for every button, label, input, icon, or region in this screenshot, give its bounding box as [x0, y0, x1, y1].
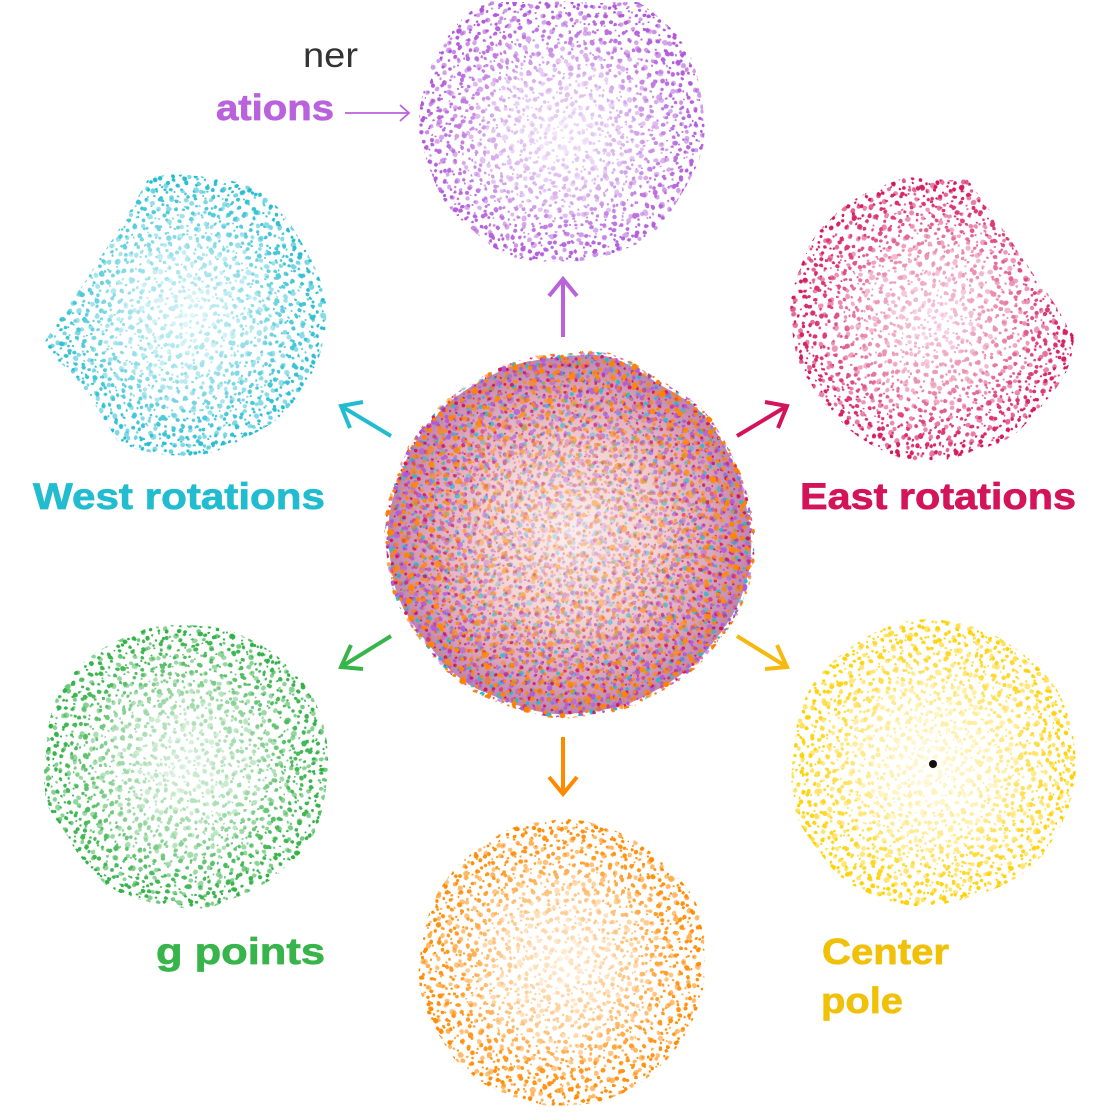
- label: pole: pole: [821, 980, 903, 1021]
- scatter: east rotations (crimson): [791, 178, 1074, 459]
- scatter: rotating points (green): [42, 623, 328, 909]
- arrow: up to purple: [549, 279, 577, 337]
- arrow: to yellow: [737, 636, 787, 669]
- arrow: to orange: [549, 737, 577, 794]
- arrow: to cyan: [341, 402, 391, 436]
- scatter: west rotations (cyan): [45, 172, 325, 456]
- scatter: center pole (yellow): [790, 621, 1076, 907]
- scatter: orange points: [419, 820, 705, 1106]
- label: green points: g points: [156, 931, 325, 972]
- arrow: to crimson: [737, 402, 787, 436]
- scatter: north rotations (purple): [420, 2, 704, 264]
- center pole marker: [929, 760, 937, 768]
- label: East rotations: East rotations: [800, 476, 1076, 517]
- label: top gray text: ner: [303, 36, 358, 75]
- arrow: to green: [341, 636, 391, 669]
- label: Center: Center: [822, 931, 949, 972]
- label: West rotations: West rotations: [33, 476, 325, 517]
- central combined sphere: [387, 352, 753, 718]
- label: purple rotations: ations: [216, 87, 334, 128]
- arrow: thin pointer to purple: [345, 105, 409, 121]
